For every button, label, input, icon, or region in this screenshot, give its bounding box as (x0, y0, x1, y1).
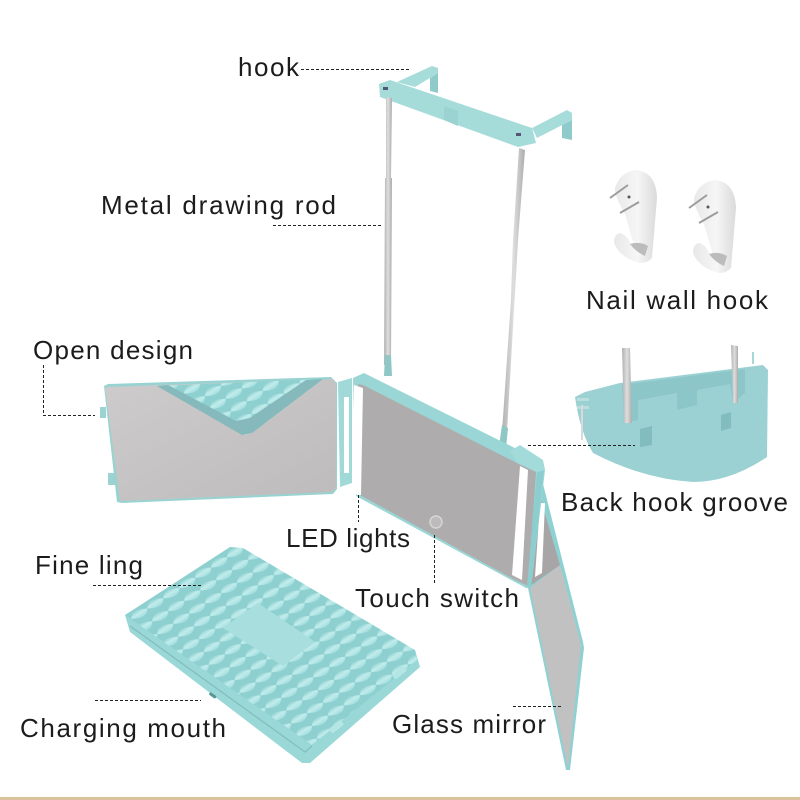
illustration: over-door hook (379, 66, 572, 147)
icon: nail wall hook right (689, 180, 736, 273)
leader: fine ling (93, 584, 201, 586)
label plate (223, 603, 315, 666)
leader: touch switch (434, 535, 436, 583)
leader: hook (301, 68, 410, 70)
illustration: left hinge (338, 378, 352, 487)
label: metal drawing rod: Metal drawing rod (101, 190, 336, 220)
label: charging mouth: Charging mouth (20, 713, 226, 743)
leader: glass mirror (513, 706, 562, 708)
leader: open design (44, 365, 95, 416)
side clips (577, 398, 589, 401)
illustration: back hook groove detail (575, 345, 768, 482)
reflection of quilted case (157, 379, 323, 435)
tabs (100, 407, 106, 418)
touch icon (430, 516, 442, 528)
leader: LED lights (358, 495, 360, 522)
square groove right (721, 412, 731, 431)
label: fine ling: Fine ling (35, 550, 143, 580)
leader: charging mouth (95, 700, 201, 702)
label: LED lights: LED lights (286, 523, 410, 553)
illustration: centre lit mirror (353, 373, 545, 588)
leader: back hook groove (528, 444, 635, 446)
illustration: closed quilted case (125, 547, 420, 763)
label: glass mirror: Glass mirror (392, 709, 546, 739)
icon: nail wall hook left (610, 170, 657, 263)
upper channel (622, 369, 745, 423)
rods (622, 348, 632, 423)
label: hook: hook (238, 52, 300, 82)
right bezel (527, 470, 544, 588)
illustration: telescopic rods (384, 97, 525, 448)
label: open design: Open design (33, 335, 193, 365)
top corner block (510, 445, 545, 472)
illustration: right mirror panel (528, 476, 584, 770)
bottom edge strip (0, 797, 800, 800)
label: touch switch: Touch switch (355, 583, 519, 613)
label: nail wall hook: Nail wall hook (586, 285, 769, 315)
illustration: left mirror panel (100, 377, 337, 503)
label: back hook groove: Back hook groove (561, 487, 788, 517)
square groove left (640, 426, 652, 447)
leader: metal drawing rod (273, 224, 381, 226)
